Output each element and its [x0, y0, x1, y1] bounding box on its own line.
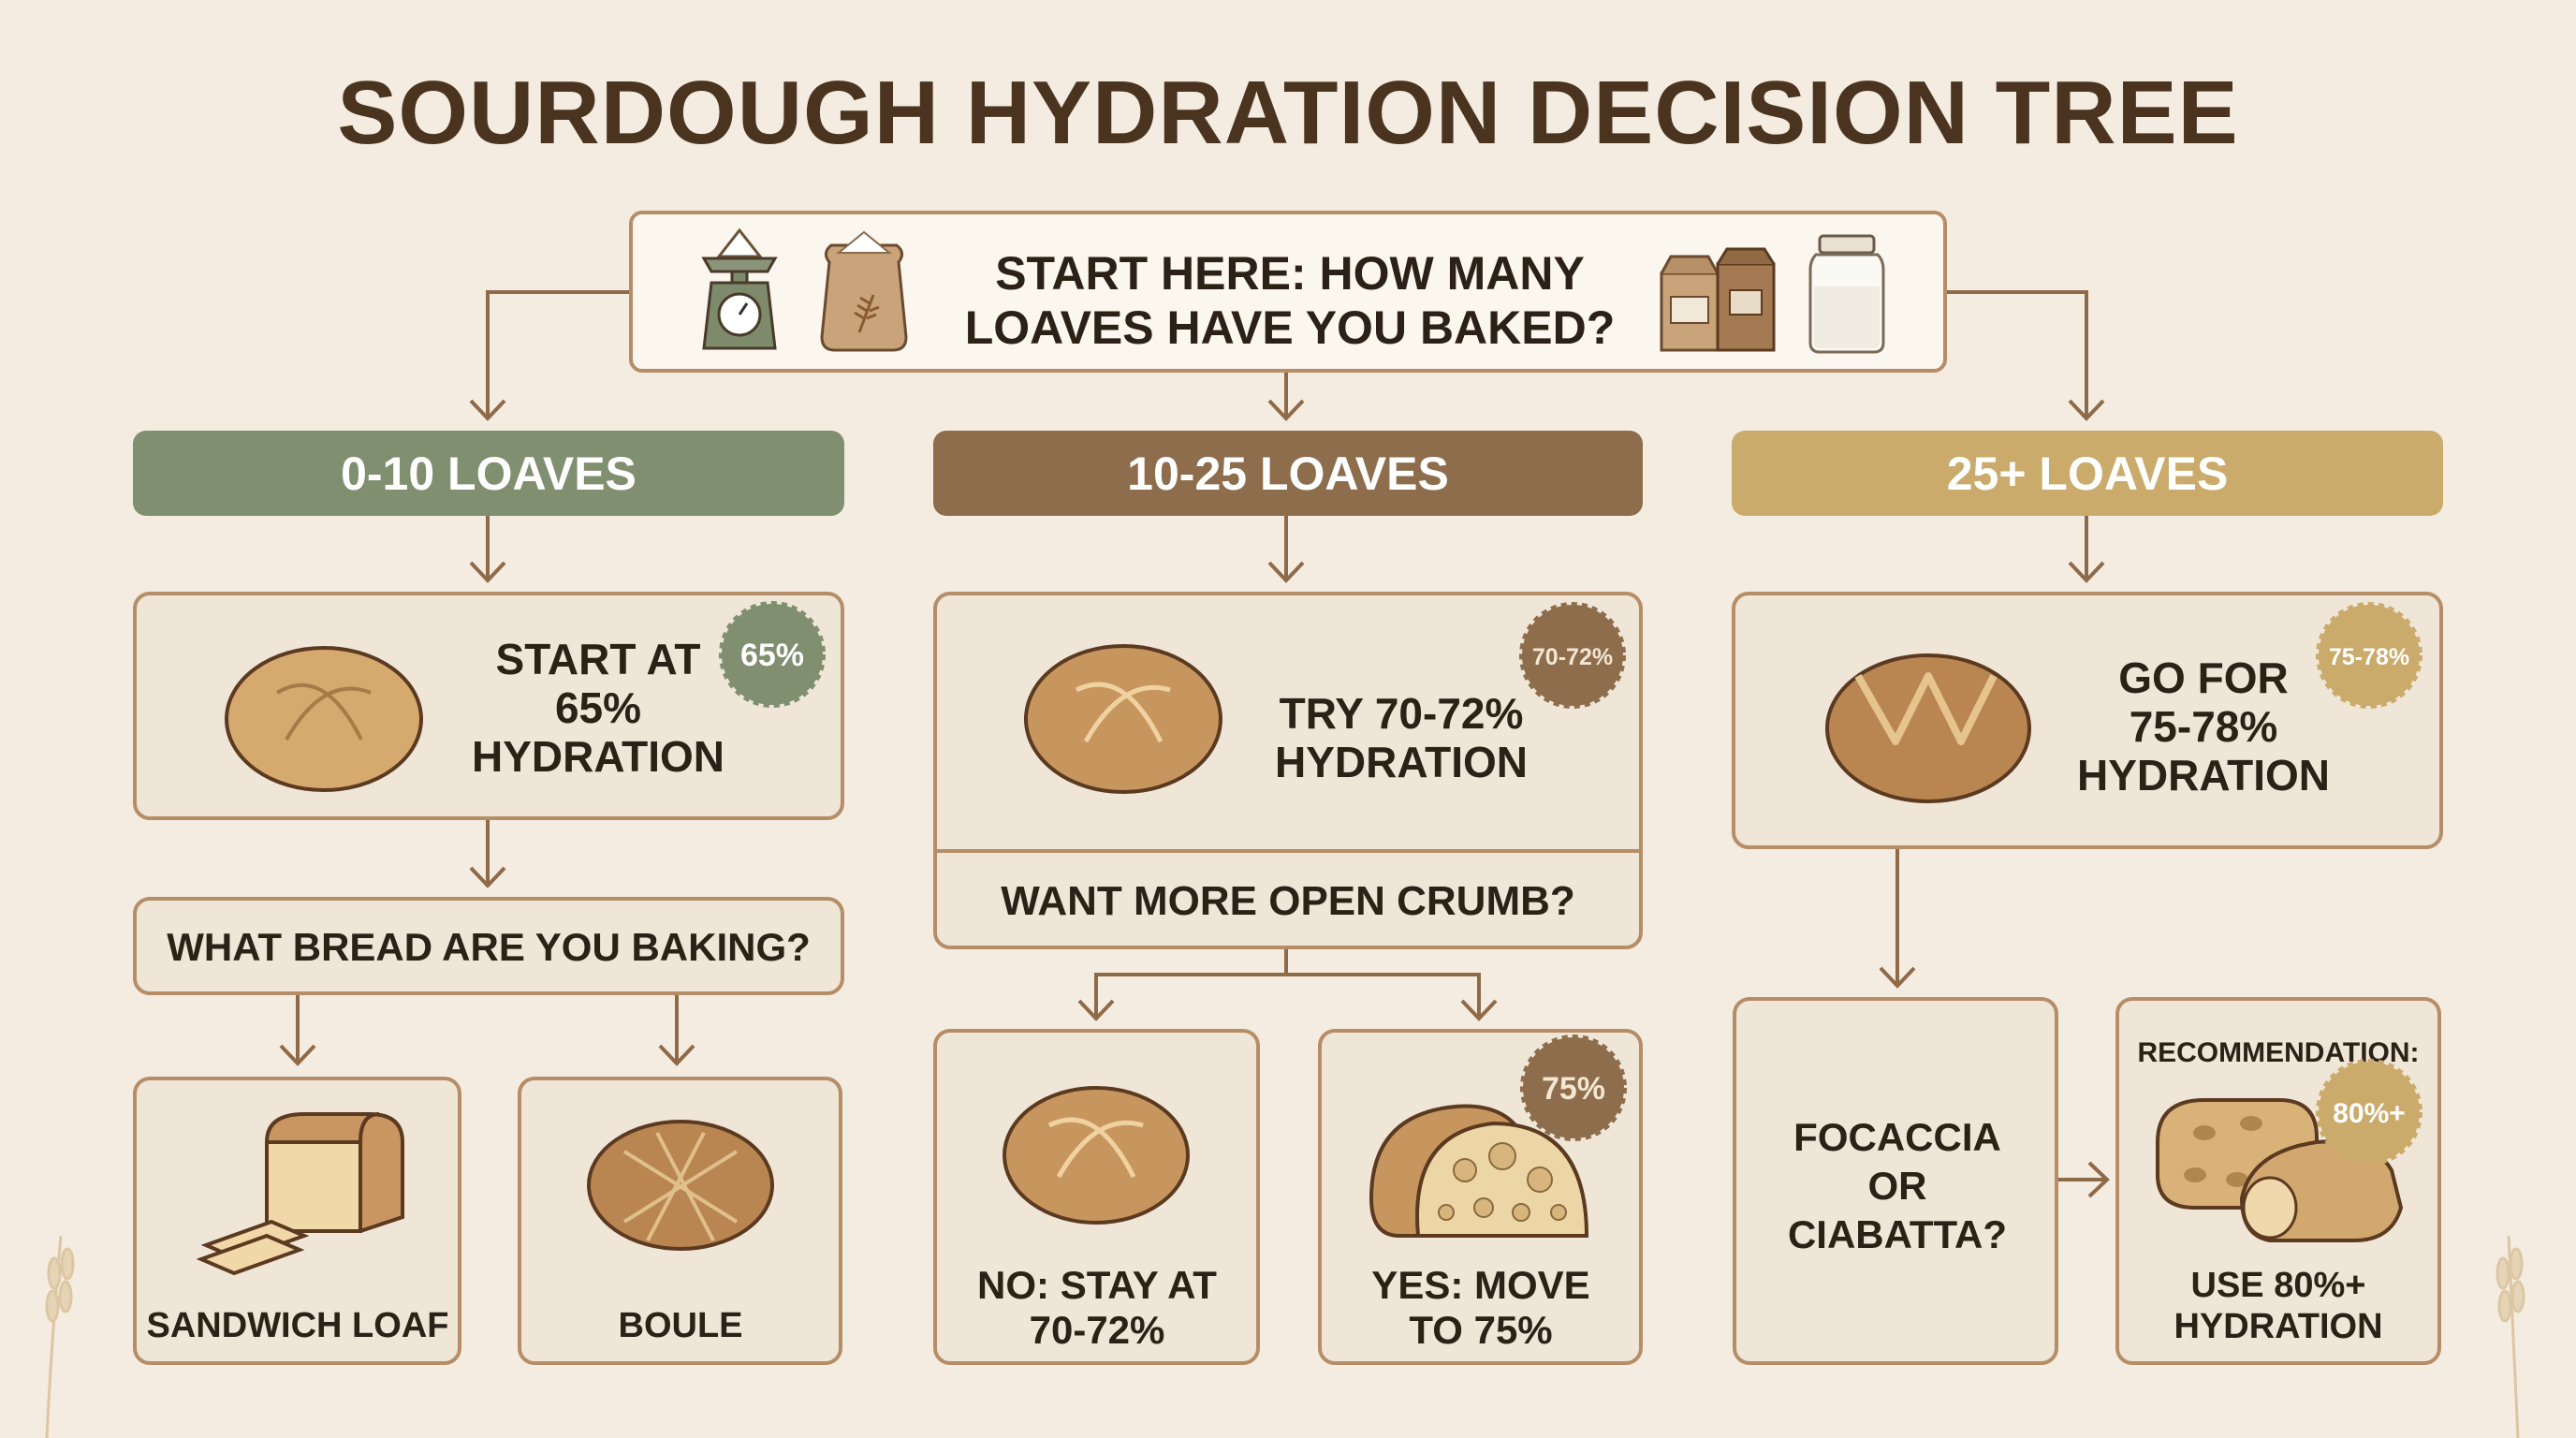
text: go for 75-78%: HYDRATION	[2077, 751, 2330, 800]
icon: wheat left	[45, 1236, 75, 1438]
text: focaccia or ciabatta: CIABATTA?	[1788, 1212, 2007, 1256]
panel: 25+ step	[1732, 592, 2443, 849]
text: try 70-72%: HYDRATION	[1275, 738, 1528, 786]
start question: LOAVES HAVE YOU BAKED?	[965, 301, 1615, 354]
text: go for 75-78%	[2077, 653, 2330, 800]
badge: 75%	[1520, 1034, 1627, 1141]
text: start at 65%: HYDRATION	[472, 732, 724, 781]
text: yes move: YES: MOVE	[1371, 1263, 1590, 1307]
bar: 25+ loaves	[1732, 431, 2443, 516]
text: go for 75-78%: 75-78%	[2130, 702, 2277, 751]
icon: scale	[702, 228, 777, 350]
text: want more open crumb	[933, 849, 1643, 926]
panel: 0-10 question	[133, 897, 844, 995]
text: yes move	[1371, 1263, 1590, 1352]
text: focaccia or ciabatta	[1788, 1115, 2007, 1256]
panel: sandwich loaf	[133, 1077, 461, 1365]
icon: loaf 2	[1024, 644, 1222, 794]
icon: jar	[1808, 234, 1885, 354]
text: start at 65%: 65%	[555, 683, 641, 732]
icon: loaf 1	[225, 646, 423, 792]
bar: 10-25 loaves: 10-25 LOAVES	[1127, 448, 1449, 500]
panel: boule	[518, 1077, 842, 1365]
text: no stay: NO: STAY AT	[977, 1263, 1217, 1307]
icon: loaf no	[1003, 1086, 1190, 1225]
start question	[965, 247, 1615, 354]
badge: 65%	[719, 601, 826, 708]
panel: focaccia question	[1733, 997, 2058, 1365]
text: use 80%: USE 80%+	[2191, 1266, 2365, 1305]
badge: 70-72%: 70-72%	[1532, 644, 1613, 670]
text: start at 65%: START AT	[496, 635, 700, 683]
badge: 65%: 65%	[740, 638, 804, 673]
text: recommendation: RECOMMENDATION:	[2137, 1037, 2420, 1068]
text: use 80%: HYDRATION	[2174, 1307, 2383, 1346]
icon: sandwich loaf	[197, 1112, 404, 1275]
text: yes move: TO 75%	[1409, 1308, 1553, 1352]
bar: 0-10 loaves	[133, 431, 844, 516]
start question: START HERE: HOW MANY	[995, 247, 1585, 300]
panel: 0-10 step	[133, 592, 844, 820]
bar: 25+ loaves: 25+ LOAVES	[1947, 448, 2228, 500]
icon: boule	[587, 1120, 774, 1251]
text: try 70-72%: TRY 70-72%	[1280, 689, 1523, 738]
text: no stay: 70-72%	[1030, 1308, 1164, 1352]
icon: loaf 3	[1825, 653, 2031, 803]
badge: 80%+	[2316, 1059, 2422, 1166]
text: use 80%	[2174, 1266, 2383, 1346]
icon: paper bags	[1661, 247, 1775, 352]
text: start at 65%	[472, 635, 724, 781]
badge: 75-78%: 75-78%	[2329, 644, 2409, 670]
panel: recommendation	[2115, 997, 2441, 1365]
text: want more open crumb: WANT MORE OPEN CRUMB?	[1001, 878, 1575, 924]
text: what bread: WHAT BREAD ARE YOU BAKING?	[167, 925, 811, 969]
badge: 80%+: 80%+	[2333, 1098, 2406, 1129]
text: focaccia or ciabatta: OR	[1868, 1164, 1926, 1208]
badge: 75-78%	[2316, 602, 2422, 709]
icon: open crumb loaf	[1369, 1105, 1588, 1238]
panel: no stay	[933, 1029, 1260, 1365]
text: no stay	[977, 1263, 1217, 1352]
title: SOURDOUGH HYDRATION DECISION TREE	[337, 63, 2239, 163]
panel: yes move	[1318, 1029, 1643, 1365]
badge: 70-72%	[1519, 602, 1626, 709]
bar: 10-25 loaves	[933, 431, 1643, 516]
icon: wheat right	[2496, 1236, 2525, 1438]
text: focaccia or ciabatta: FOCACCIA	[1793, 1115, 2001, 1159]
panel: 10-25 step	[933, 592, 1643, 949]
badge: 75%: 75%	[1542, 1071, 1605, 1107]
text: go for 75-78%: GO FOR	[2118, 653, 2289, 702]
text: boule: BOULE	[618, 1306, 743, 1345]
icon: focaccia and ciabatta	[2156, 1098, 2403, 1242]
text: sandwich loaf: SANDWICH LOAF	[147, 1306, 448, 1345]
text: try 70-72%	[1275, 689, 1528, 786]
start box	[629, 211, 1947, 373]
icon: flour sack	[820, 230, 908, 352]
bar: 0-10 loaves: 0-10 LOAVES	[341, 448, 637, 500]
